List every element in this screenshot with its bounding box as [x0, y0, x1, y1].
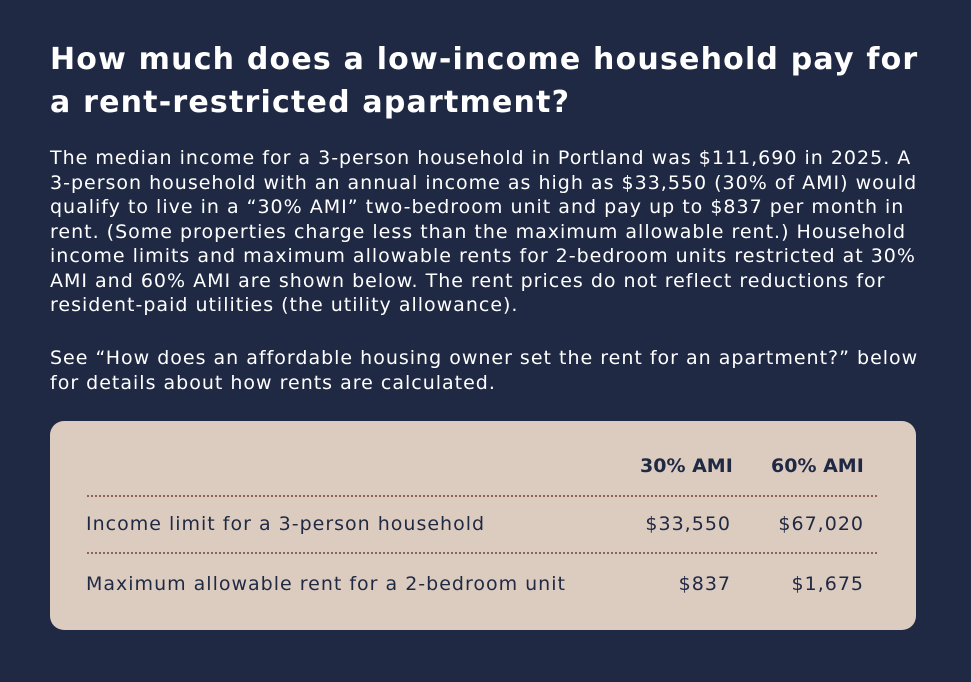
text block: intro: AMI and 60% AMI are shown below. The rent prices do not reflect reductions for — [50, 270, 885, 292]
text block: intro: 3-person household with an annual income as high as $33,550 (30% of AMI) would — [50, 172, 917, 194]
text block: see below: for details about how rents are calculated. — [50, 372, 496, 394]
header: 60% AMI: 60% AMI — [771, 455, 864, 477]
text block: intro: income limits and maximum allowable rents for 2-bedroom units restricted at 30% — [50, 245, 916, 267]
text block: intro: resident-paid utilities (the utility allowance). — [50, 294, 518, 316]
row: max rent: $1,675 — [792, 573, 864, 595]
panel: table — [50, 421, 916, 630]
row: max rent: Maximum allowable rent for a 2-bedroom unit — [86, 573, 566, 595]
header: 30% AMI: 30% AMI — [640, 455, 733, 477]
title: How much does a low-income household pay for — [50, 42, 918, 77]
title — [50, 42, 918, 120]
row: income limit: $33,550 — [645, 513, 731, 535]
text block: intro — [50, 147, 917, 316]
text block: intro: The median income for a 3-person household in Portland was $111,690 in 2025. A — [50, 147, 911, 169]
row: max rent — [86, 573, 864, 595]
title: a rent-restricted apartment? — [50, 85, 570, 120]
text block: intro: rent. (Some properties charge less than the maximum allowable rent.) Household — [50, 220, 906, 242]
text block: see below — [50, 347, 918, 394]
row: income limit: Income limit for a 3-person household — [86, 513, 485, 535]
row: max rent: $837 — [679, 573, 731, 595]
row: income limit — [86, 513, 864, 535]
row: income limit: $67,020 — [778, 513, 864, 535]
text block: intro: qualify to live in a “30% AMI” two-bedroom unit and pay up to $837 per month in — [50, 196, 904, 218]
text block: see below: See “How does an affordable housing owner set the rent for an apartment?” below — [50, 347, 918, 369]
